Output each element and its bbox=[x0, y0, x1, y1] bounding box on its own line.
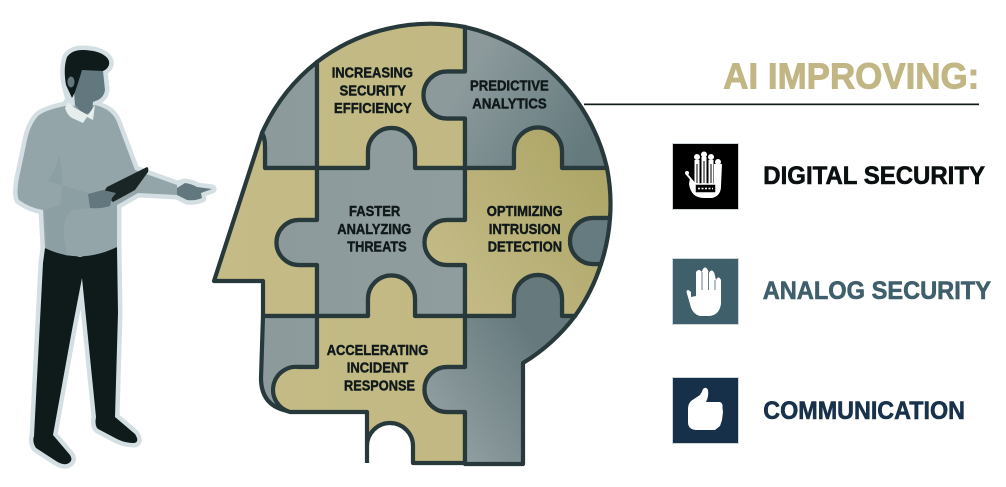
label: digital security: DIGITAL SECURITY bbox=[763, 162, 985, 190]
puzzle label: optimizing intrusion detection: DETECTION bbox=[488, 239, 562, 256]
piece: faster analyzing threats bbox=[276, 128, 465, 316]
label: analog security: ANALOG SECURITY bbox=[763, 277, 991, 305]
person halo outline bbox=[18, 50, 212, 464]
puzzle label: increasing security efficiency: EFFICIENCY bbox=[334, 100, 412, 117]
puzzle label: faster analyzing threats: FASTER bbox=[349, 203, 400, 220]
sweater shading bbox=[45, 155, 90, 256]
puzzle label: faster analyzing threats: ANALYZING bbox=[337, 221, 411, 238]
label: communication: COMMUNICATION bbox=[763, 397, 965, 425]
ear bbox=[68, 76, 74, 88]
pointing hand bbox=[177, 183, 212, 200]
sweater bbox=[18, 105, 177, 256]
notch edge bbox=[365, 446, 369, 463]
puzzle label: predictive analytics: ANALYTICS bbox=[472, 96, 547, 113]
person illustration bbox=[18, 50, 212, 464]
icon: digital security robotic hand bbox=[672, 144, 738, 210]
piece: jaw gray bbox=[261, 316, 317, 411]
piece: increasing security efficiency bbox=[317, 24, 465, 168]
puzzle label: predictive analytics bbox=[470, 78, 549, 113]
head jigsaw puzzle bbox=[214, 24, 611, 464]
heading rule bbox=[584, 104, 979, 105]
puzzle label: accelerating incident response: INCIDENT bbox=[347, 360, 408, 377]
puzzle label: optimizing intrusion detection bbox=[487, 203, 563, 256]
collar bbox=[65, 102, 95, 123]
holding hand bbox=[88, 190, 116, 208]
puzzle label: accelerating incident response: RESPONSE bbox=[344, 378, 415, 395]
neck and face bbox=[74, 68, 105, 115]
puzzle label: increasing security efficiency: SECURITY bbox=[340, 82, 406, 100]
puzzle label: optimizing intrusion detection: INTRUSION bbox=[489, 221, 561, 238]
puzzle label: faster analyzing threats: THREATS bbox=[347, 239, 407, 256]
piece: top back gray bbox=[262, 62, 317, 168]
icon: analog security open hand bbox=[672, 258, 738, 324]
puzzle label: accelerating incident response: ACCELERATING bbox=[327, 342, 428, 359]
title: AI IMPROVING: bbox=[723, 56, 979, 96]
piece: accelerating incident response bbox=[273, 276, 465, 463]
puzzle label: faster analyzing threats bbox=[337, 203, 411, 256]
piece: optimizing intrusion detection bbox=[424, 128, 611, 316]
puzzle label: optimizing intrusion detection: OPTIMIZING bbox=[487, 203, 563, 220]
piece: neck gray bbox=[424, 275, 575, 464]
piece: predictive analytics bbox=[424, 27, 607, 168]
piece: right ear gray bbox=[570, 218, 610, 264]
piece: face tan bbox=[214, 133, 317, 316]
puzzle label: increasing security efficiency bbox=[332, 65, 413, 117]
puzzle label: predictive analytics: PREDICTIVE bbox=[470, 78, 549, 95]
puzzle label: increasing security efficiency: INCREASING bbox=[332, 65, 413, 82]
puzzle label: accelerating incident response bbox=[327, 342, 428, 395]
tablet bbox=[103, 167, 148, 202]
icon: communication thumbs up bbox=[672, 378, 738, 444]
hair bbox=[65, 50, 109, 98]
legs bbox=[33, 247, 137, 464]
